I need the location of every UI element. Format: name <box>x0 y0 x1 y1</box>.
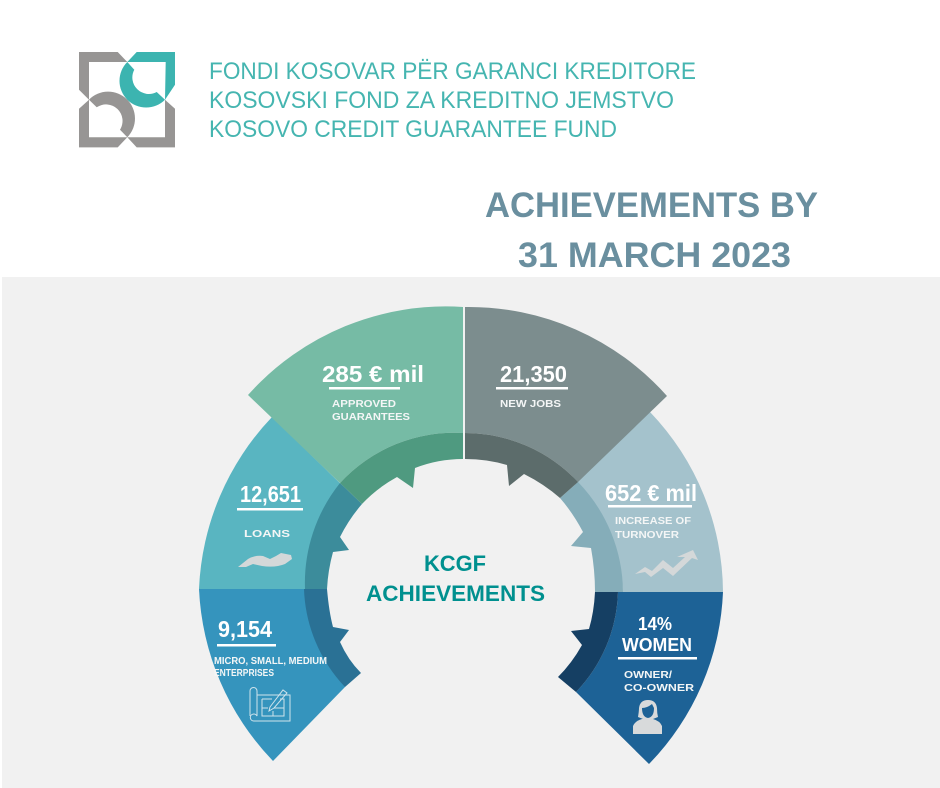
segment: new jobs: 21,350 <box>500 361 567 387</box>
organisation names: KOSOVO CREDIT GUARANTEE FUND <box>209 116 617 143</box>
segment: micro small medium enterprises: ENTERPRISES <box>214 667 274 679</box>
title <box>485 186 818 275</box>
segment: women owners <box>558 592 723 764</box>
segment: increase of turnover: TURNOVER <box>615 529 679 541</box>
segment: new jobs <box>465 307 667 498</box>
organisation names: FONDI KOSOVAR PËR GARANCI KREDITORE <box>209 58 696 85</box>
icon: hand <box>238 553 292 567</box>
centre label: KCGF <box>424 551 486 576</box>
logo <box>79 52 175 147</box>
segment: approved guarantees: 285 € mil <box>322 361 424 387</box>
segment: loans: LOANS <box>244 528 290 540</box>
segment: increase of turnover: INCREASE OF <box>615 515 692 527</box>
title: 31 MARCH 2023 <box>518 236 791 275</box>
title: ACHIEVEMENTS BY <box>485 186 818 225</box>
segment: new jobs: NEW JOBS <box>500 398 561 410</box>
segment: approved guarantees: APPROVED <box>332 398 396 410</box>
icon: growth arrow <box>635 550 698 577</box>
segment: women owners: 14% <box>638 614 672 634</box>
segment: women owners: OWNER/ <box>624 669 672 681</box>
panel: background <box>2 277 940 788</box>
segment: approved guarantees: GUARANTEES <box>332 411 410 423</box>
segment: micro small medium enterprises <box>199 589 361 761</box>
segment: increase of turnover <box>560 412 723 592</box>
segment: approved guarantees <box>248 306 463 504</box>
icon: woman <box>633 700 662 734</box>
organisation names: KOSOVSKI FOND ZA KREDITNO JEMSTVO <box>209 87 674 114</box>
segment: loans: 12,651 <box>240 481 301 507</box>
segment: women owners: WOMEN <box>622 635 692 655</box>
segment: women owners: CO-OWNER <box>624 682 694 694</box>
icon: blueprint <box>250 688 290 721</box>
segment: loans <box>199 417 362 589</box>
organisation names <box>209 58 696 143</box>
centre label <box>366 551 545 606</box>
centre label: ACHIEVEMENTS <box>366 581 545 606</box>
segment: micro small medium enterprises: 9,154 <box>218 616 272 642</box>
segment: micro small medium enterprises: MICRO, SMALL, MEDIUM <box>214 655 327 667</box>
segment: increase of turnover: 652 € mil <box>605 480 697 506</box>
